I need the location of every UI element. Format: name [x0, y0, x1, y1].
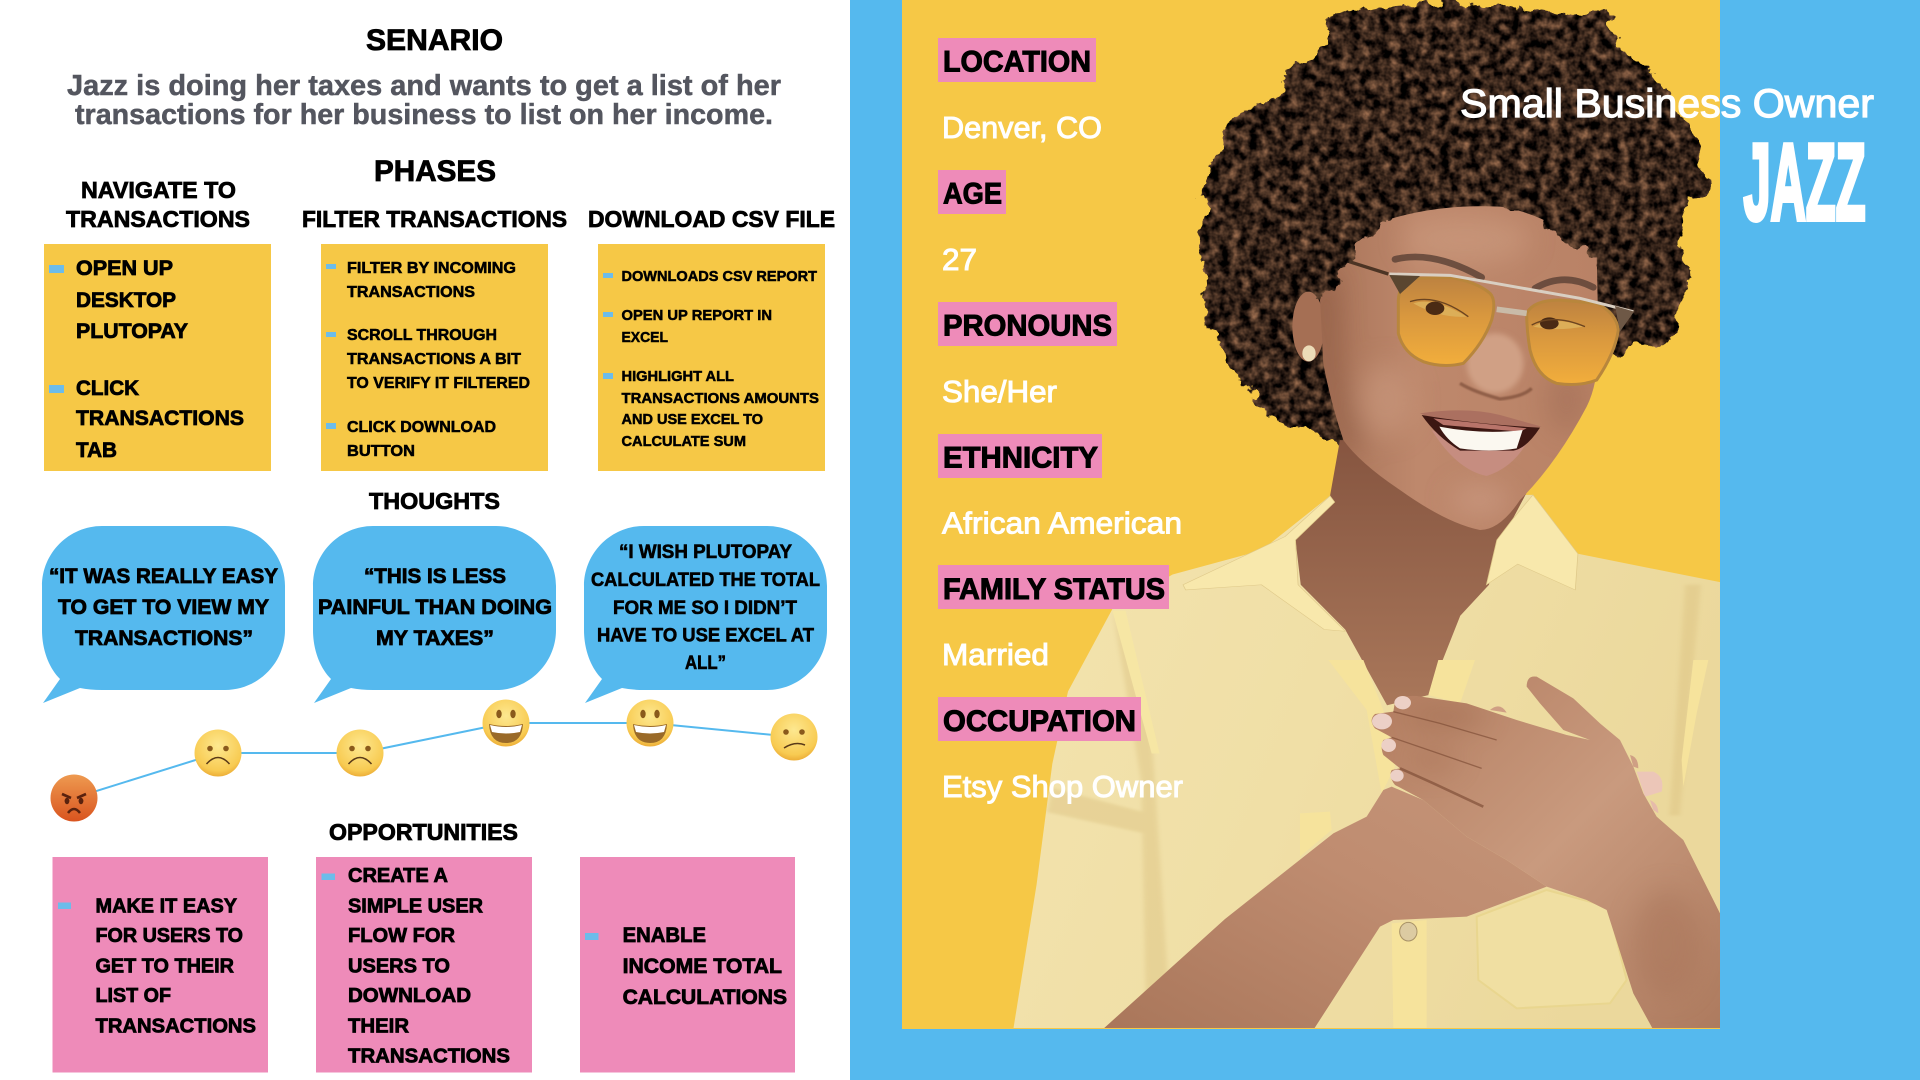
- label: ethnicity: ETHNICITY: [943, 442, 1098, 474]
- bullet marker: [58, 902, 71, 909]
- speech bubble: thought 1: [42, 526, 285, 703]
- heading: phase 1 navigate to transactions: [66, 177, 250, 232]
- value: age: 27: [942, 242, 977, 277]
- step text: PLUTOPAY: [76, 319, 188, 343]
- opportunity text: LIST OF: [96, 984, 171, 1007]
- photo: eyes: [1410, 299, 1585, 329]
- step text: OPEN UP: [76, 256, 173, 280]
- text block: scenario description: Jazz is doing her taxes and wants to get a list of her: [67, 70, 781, 102]
- opportunity text: CREATE A: [348, 864, 448, 887]
- icon: slightly frowning face: [770, 714, 818, 760]
- opportunity text: CALCULATIONS: [623, 985, 787, 1009]
- step text: AND USE EXCEL TO: [622, 412, 763, 428]
- title: scenario heading: SENARIO: [366, 24, 503, 57]
- step text: HIGHLIGHT ALL: [622, 369, 734, 385]
- label: age: AGE: [943, 178, 1002, 210]
- photo: face shading: [1313, 217, 1587, 517]
- label: occupation: OCCUPATION: [943, 705, 1136, 738]
- step text: [347, 260, 530, 460]
- step text: TRANSACTIONS A BIT: [347, 351, 521, 368]
- chart: emotion journey line: [50, 700, 818, 822]
- step text: EXCEL: [622, 330, 668, 346]
- heading: phase 3 download csv file: DOWNLOAD CSV FILE: [588, 206, 835, 232]
- photo: shirt button: [1400, 922, 1417, 941]
- photo: shirt plackets: [1300, 660, 1708, 1030]
- icon: frowning face: [336, 730, 384, 776]
- thought text: FOR ME SO I DIDN’T: [613, 598, 797, 619]
- panel: phase 1 steps: [44, 244, 271, 471]
- step text: TRANSACTIONS: [347, 284, 475, 301]
- step text: DESKTOP: [76, 288, 176, 312]
- step text: FILTER BY INCOMING: [347, 260, 516, 277]
- step text: CLICK DOWNLOAD: [347, 419, 496, 436]
- opportunity text: THEIR: [348, 1015, 409, 1038]
- photo: nose: [1460, 333, 1532, 399]
- photo: curly hair: [1198, 2, 1712, 445]
- photo: smiling woman with curly hair and orange glasses: [1013, 2, 1724, 1031]
- thought text: [591, 542, 820, 674]
- thought text: [49, 565, 278, 650]
- step text: [76, 256, 244, 462]
- photo: forearm underneath: [1102, 787, 1547, 1030]
- photo: lower chest pocket: [1477, 890, 1627, 1008]
- heading: opportunities: OPPORTUNITIES: [329, 819, 518, 845]
- background: white scenario side: [0, 0, 850, 1080]
- photo: finger gaps: [1392, 712, 1497, 807]
- thought text: “THIS IS LESS: [364, 565, 506, 588]
- panel: opportunity 3: [580, 857, 795, 1072]
- photo: neck: [1296, 440, 1526, 706]
- label: pronouns: PRONOUNS: [943, 310, 1112, 342]
- opportunity text: [623, 923, 787, 1009]
- value: location: Denver, CO: [942, 110, 1102, 145]
- heading: phase 1 navigate to transactions: NAVIGATE TO: [81, 177, 236, 203]
- thought text: MY TAXES”: [376, 627, 494, 650]
- photo: smile: [1420, 410, 1542, 476]
- opportunity text: [348, 864, 510, 1068]
- photo: shirt collar: [1183, 495, 1578, 631]
- photo: teeth: [1439, 427, 1523, 450]
- photo: eyebrows: [1395, 257, 1593, 288]
- speech bubble: thought 3: [584, 526, 827, 703]
- photo: shirt: [1013, 440, 1724, 1031]
- opportunity text: DOWNLOAD: [348, 984, 471, 1007]
- bullet marker: [322, 874, 335, 880]
- photo: shoulder seam: [1114, 618, 1155, 754]
- icon: frowning face: [194, 730, 242, 776]
- speech bubble: thought 2: [313, 526, 556, 703]
- thought text: HAVE TO USE EXCEL AT: [597, 626, 814, 646]
- photo: face shape: [1320, 206, 1599, 530]
- thought text: “IT WAS REALLY EASY: [49, 565, 278, 588]
- step text: [622, 269, 819, 450]
- thought text: TRANSACTIONS”: [75, 627, 253, 650]
- value: pronouns: She/Her: [942, 374, 1057, 409]
- heading: phase 2 filter transactions: FILTER TRANSACTIONS: [302, 206, 567, 232]
- photo: facial features: [1349, 257, 1634, 476]
- persona role: Small Business Owner: [1460, 82, 1874, 126]
- value: occupation: Etsy Shop Owner: [942, 769, 1183, 804]
- opportunity text: GET TO THEIR: [96, 954, 234, 978]
- step text: CALCULATE SUM: [622, 434, 746, 450]
- photo: hands and forearms: [1102, 660, 1723, 1030]
- step text: CLICK: [76, 376, 139, 400]
- thought text: “I WISH PLUTOPAY: [619, 542, 792, 563]
- photo: hairline fringe: [1316, 207, 1597, 299]
- thought text: TO GET TO VIEW MY: [58, 596, 269, 619]
- photo: ear and earring: [1292, 292, 1324, 362]
- opportunity text: INCOME TOTAL: [623, 954, 782, 978]
- step text: TO VERIFY IT FILTERED: [347, 375, 530, 392]
- photo: upper hand: [1372, 676, 1723, 1030]
- panel: phase 3 steps: [598, 244, 825, 471]
- icon: grinning face: [626, 700, 674, 746]
- photo: finger nails: [1372, 696, 1411, 782]
- photo: hand shading: [1430, 709, 1686, 974]
- opportunity text: MAKE IT EASY: [96, 894, 237, 918]
- step text: DOWNLOADS CSV REPORT: [622, 269, 817, 285]
- thought text: PAINFUL THAN DOING: [318, 596, 552, 619]
- opportunity text: FOR USERS TO: [96, 924, 243, 947]
- opportunity text: USERS TO: [348, 954, 450, 978]
- bullet markers: [603, 273, 613, 379]
- opportunity text: TRANSACTIONS: [96, 1015, 256, 1038]
- icon: grinning face: [482, 700, 530, 746]
- icon: angry face: [50, 774, 98, 822]
- thought text: ALL”: [685, 653, 726, 674]
- thought text: CALCULATED THE TOTAL: [591, 570, 820, 591]
- opportunity text: TRANSACTIONS: [348, 1044, 510, 1068]
- panel: phase 2 steps: [321, 244, 548, 471]
- photo: right lens: [1527, 300, 1618, 384]
- step text: TRANSACTIONS: [76, 406, 244, 430]
- panel: yellow persona card: [902, 0, 1720, 1029]
- heading: phases: PHASES: [374, 155, 496, 188]
- label: location: LOCATION: [943, 46, 1091, 78]
- step text: SCROLL THROUGH: [347, 327, 497, 344]
- photo: left lens: [1398, 277, 1494, 365]
- opportunity text: FLOW FOR: [348, 924, 455, 947]
- value: ethnicity: African American: [942, 506, 1182, 540]
- text block: scenario description: transactions for her business to list on her income.: [75, 99, 773, 131]
- label: family status: FAMILY STATUS: [943, 573, 1165, 606]
- step text: TRANSACTIONS AMOUNTS: [622, 391, 819, 407]
- photo: hidden fingertips: [1490, 706, 1662, 813]
- label: age: [938, 170, 1006, 214]
- step text: OPEN UP REPORT IN: [622, 308, 772, 324]
- step text: BUTTON: [347, 443, 415, 460]
- opportunity text: SIMPLE USER: [348, 894, 483, 918]
- photo: glasses: [1349, 262, 1634, 384]
- bullet markers: [326, 264, 336, 429]
- heading: phase 1 navigate to transactions: TRANSACTIONS: [66, 206, 250, 232]
- thought text: [318, 565, 552, 650]
- text block: scenario description: [67, 70, 781, 131]
- step text: TAB: [76, 438, 117, 462]
- bullet marker: [585, 933, 598, 940]
- panel: opportunity 2: [316, 857, 532, 1072]
- value: family status: Married: [942, 637, 1049, 672]
- opportunity text: ENABLE: [623, 923, 706, 947]
- background: blue persona panel: [850, 0, 1920, 1080]
- bullet markers: [49, 265, 64, 393]
- heading: thoughts: THOUGHTS: [369, 488, 500, 514]
- photo: face: [1292, 206, 1599, 530]
- opportunity text: [96, 894, 256, 1038]
- panel: opportunity 1: [52, 857, 268, 1072]
